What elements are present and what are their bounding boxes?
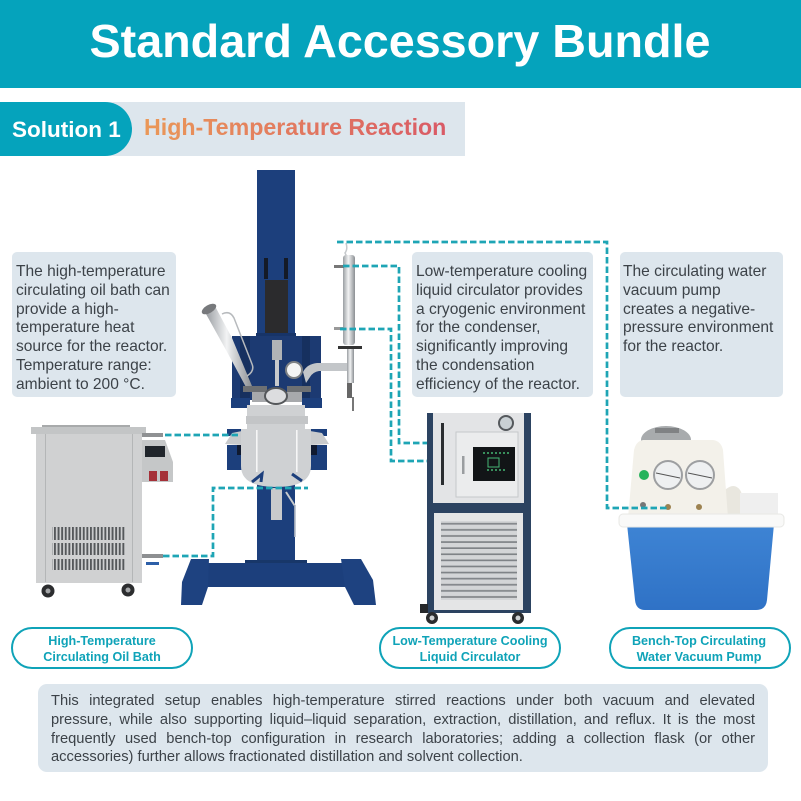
summary text block: This integrated setup enables high-temperature stirred reactions under both vacuum and elevated (51, 693, 755, 709)
text block: cooling circulator description: efficiency of the reactor. (416, 376, 580, 393)
connector: vacuum line to pump (337, 242, 668, 508)
label: cooling circulator (380, 628, 560, 668)
text block: oil bath description (12, 252, 176, 397)
text block: vacuum pump description: pressure environment (623, 319, 774, 336)
text block: vacuum pump description: vacuum pump (623, 282, 721, 299)
connector: oil bath outlet to jacket (165, 434, 240, 436)
stirrer shaft and gauge (231, 340, 322, 408)
summary text block: frequently used bench-top configuration in research laboratories; adding a collection flask (or other (51, 731, 755, 747)
text block: cooling circulator description: the condensation (416, 357, 534, 374)
label: vacuum pump (610, 628, 790, 668)
illustration: high-temperature oil bath (31, 425, 173, 598)
connector: condenser lower to circulator (340, 329, 427, 461)
addition funnel (200, 302, 253, 389)
text block: cooling circulator description: Low-temperature cooling (416, 263, 587, 280)
text block: oil bath description: source for the reactor. (16, 338, 167, 355)
text block: cooling circulator description: liquid circulator provides (416, 282, 583, 299)
connector: condenser upper to circulator (343, 266, 427, 443)
stand base (181, 559, 376, 605)
section heading: Solution 1: High-Temperature Reaction (144, 114, 446, 140)
text block: oil bath description: ambient to 200 °C. (16, 376, 145, 393)
illustration: circulating water vacuum pump (619, 426, 784, 610)
title banner: Standard Accessory Bundle (90, 15, 710, 67)
text block: vacuum pump description (620, 252, 783, 397)
label: cooling circulator: Low-Temperature Cooling (392, 634, 548, 648)
text block: oil bath description: circulating oil bath can (16, 282, 170, 299)
illustration: low-temperature cooling circulator (420, 413, 531, 624)
label: cooling circulator: Liquid Circulator (420, 650, 520, 664)
label: vacuum pump: Water Vacuum Pump (637, 650, 762, 664)
text block: vacuum pump description: The circulating water (623, 263, 766, 280)
section heading: Solution 1: Solution 1 (12, 117, 121, 142)
label: vacuum pump: Bench-Top Circulating (632, 634, 766, 648)
text block: cooling circulator description: a cryogenic environment (416, 301, 586, 318)
text block: cooling circulator description: significantly improving (416, 338, 568, 355)
summary text block: pressure, while also supporting liquid–liquid separation, extraction, distillation, and reflux. It is the most (51, 712, 755, 728)
label: oil bath: High-Temperature (48, 634, 156, 648)
text block: cooling circulator description: for the condenser, (416, 319, 540, 336)
summary text block (38, 684, 768, 772)
text block: vacuum pump description: creates a negative- (623, 301, 755, 318)
connector: oil bath inlet to jacket (163, 488, 308, 556)
text block: oil bath description: The high-temperature (16, 263, 166, 280)
text block: vacuum pump description: for the reactor. (623, 338, 723, 355)
title banner (0, 0, 801, 88)
label: oil bath: Circulating Oil Bath (43, 650, 161, 664)
label: oil bath (12, 628, 192, 668)
text block: oil bath description: temperature heat (16, 319, 135, 336)
text block: oil bath description: Temperature range: (16, 357, 152, 374)
illustration: reactor on stand (181, 170, 376, 605)
text block: cooling circulator description (412, 252, 593, 397)
condenser (303, 243, 362, 411)
reactor vessel (225, 405, 329, 537)
text block: oil bath description: provide a high- (16, 301, 119, 318)
stand column (232, 170, 321, 566)
summary text block: accessories) further allows fractionated distillation and solvent collection. (51, 749, 523, 765)
section heading: Solution 1 (0, 102, 465, 156)
